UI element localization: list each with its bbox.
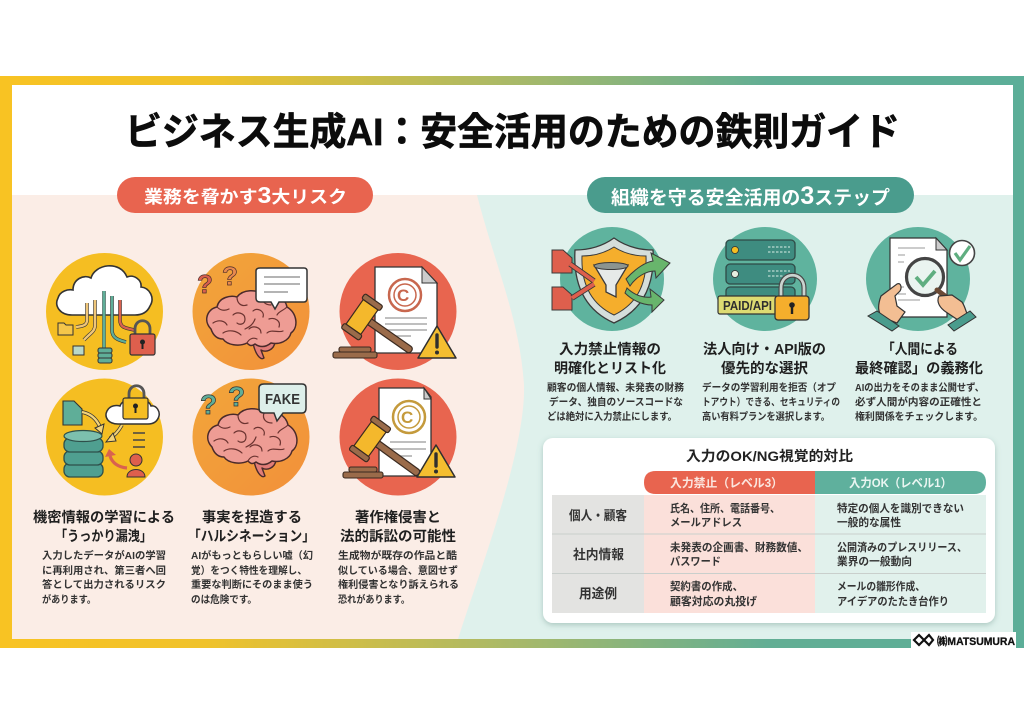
column header: allowed: 入力OK（レベル1） bbox=[849, 475, 952, 490]
text block: risk 1: 「うっかり漏洩」 bbox=[55, 528, 152, 545]
text block: step 2: トアウト）できる、セキュリティの bbox=[702, 396, 840, 408]
heading pill: risks: 業務を脅かす 3大リスク bbox=[144, 182, 347, 208]
row label column bbox=[552, 495, 644, 613]
text block: step 3: 権利関係をチェックします。 bbox=[855, 410, 983, 423]
icon: copyright document and warning: C bbox=[401, 408, 413, 427]
row: internal information: 業界の一般動向 bbox=[837, 554, 912, 568]
icon: shield and funnel bbox=[552, 227, 670, 331]
text block: risk 3: 著作権侵害と bbox=[355, 508, 441, 526]
text block: risk 3: 権利侵害となり訴えられる bbox=[338, 578, 459, 591]
icon: cloud data leak bbox=[46, 253, 163, 370]
text block: step 3: 必ず人間が内容の正確性と bbox=[855, 396, 982, 408]
row: use cases: アイデアのたたき台作り bbox=[837, 594, 949, 608]
allowed column bbox=[815, 495, 986, 613]
text block: risk 2 bbox=[188, 508, 315, 606]
icon: data leak database bbox=[46, 378, 163, 496]
text block: risk 3: 生成物が既存の作品と酷 bbox=[338, 549, 458, 562]
row: use cases: 用途例 bbox=[579, 586, 617, 601]
text block: step 1: 顧客の個人情報、未発表の財務 bbox=[547, 381, 685, 394]
icon: brain with speech bubble bbox=[192, 253, 310, 370]
text block: step 1: 入力禁止情報の bbox=[559, 340, 661, 358]
icon: brain with speech bubble: ? bbox=[197, 269, 213, 299]
text block: risk 3 bbox=[338, 508, 459, 606]
text block: step 1 bbox=[547, 340, 685, 423]
text block: risk 3: 恐れがあります。 bbox=[338, 593, 410, 606]
icon: copyright document and gavel bbox=[333, 253, 456, 370]
text block: risk 1: に再利用され、第三者へ回 bbox=[42, 564, 166, 577]
row: internal information: 社内情報 bbox=[573, 547, 624, 562]
text block: step 3: 最終確認」の義務化 bbox=[855, 359, 984, 377]
row: internal information: 未発表の企画書、財務数値、 bbox=[670, 540, 808, 554]
text block: step 2: 高い有料プランを選択します。 bbox=[702, 410, 830, 423]
text block: risk 1: 入力したデータがAIの学習 bbox=[42, 549, 166, 562]
text block: step 2 bbox=[702, 341, 840, 423]
text block: step 3: 「人間による bbox=[882, 341, 958, 358]
text block: risk 1: 機密情報の学習による bbox=[33, 508, 175, 526]
icon: server and lock: PAID/API bbox=[723, 299, 772, 313]
column header: forbidden bbox=[644, 471, 815, 494]
text block: risk 2: 重要な判断にそのまま使う bbox=[191, 578, 313, 591]
row: personal and customer: 個人・顧客 bbox=[569, 508, 627, 523]
row: personal and customer: 氏名、住所、電話番号、 bbox=[670, 501, 780, 515]
icon: brain with FAKE bubble: FAKE bbox=[265, 392, 300, 408]
row: personal and customer: 一般的な属性 bbox=[837, 515, 901, 529]
text block: step 1: どは絶対に入力禁止にします。 bbox=[547, 410, 677, 423]
table title: 入力のOK/NG視覚的対比 bbox=[686, 448, 853, 464]
row: use cases: メールの雛形作成、 bbox=[837, 579, 925, 593]
text block: risk 2: 事実を捏造する bbox=[202, 508, 302, 526]
row: personal and customer: メールアドレス bbox=[670, 516, 742, 529]
text block: risk 1: 答として出力されるリスク bbox=[42, 578, 166, 591]
icon: copyright document and gavel: C bbox=[397, 286, 409, 305]
gradient frame bbox=[0, 76, 1024, 648]
text block: step 2: 法人向け・API版の bbox=[703, 341, 826, 358]
text block: step 3: AIの出力をそのまま公開せず、 bbox=[855, 381, 984, 394]
text block: risk 1: があります。 bbox=[42, 593, 96, 606]
row: internal information: 公開済みのプレスリリース、 bbox=[837, 540, 967, 554]
forbidden column bbox=[644, 495, 815, 613]
text block: step 1: データ、独自のソースコードな bbox=[549, 396, 683, 408]
row: internal information: パスワード bbox=[670, 555, 721, 568]
text block: step 2: データの学習利用を拒否（オプ bbox=[702, 381, 837, 394]
icon: brain with FAKE bubble bbox=[192, 378, 310, 496]
icon: brain with FAKE bubble: ? bbox=[200, 389, 217, 420]
text block: risk 2: AIがもっともらしい嘘（幻 bbox=[191, 549, 313, 562]
text block: step 2: 優先的な選択 bbox=[721, 359, 809, 377]
panel: risks background bbox=[12, 195, 524, 639]
row: personal and customer: 特定の個人を識別できない bbox=[837, 501, 964, 515]
text block: risk 2: 覚）をつく特性を理解し、 bbox=[191, 564, 307, 577]
icon: brain with FAKE bubble: ? bbox=[228, 381, 245, 412]
icon: copyright document and warning bbox=[340, 378, 456, 496]
panel: OK/NG comparison table bbox=[543, 438, 995, 623]
text block: risk 2: のは危険です。 bbox=[191, 593, 257, 606]
row: internal information bbox=[573, 540, 967, 568]
row: personal and customer bbox=[569, 501, 964, 529]
icon: brain with speech bubble: ? bbox=[222, 261, 238, 291]
heading pill: risks bbox=[117, 177, 373, 213]
text block: risk 1 bbox=[33, 508, 175, 606]
text block: risk 3: 似している場合、意図せず bbox=[338, 564, 458, 577]
icon: server and lock bbox=[713, 227, 817, 331]
row: use cases bbox=[579, 579, 949, 608]
logo: MATSUMURA: ㈱MATSUMURA bbox=[937, 634, 1015, 648]
row: use cases: 顧客対応の丸投げ bbox=[670, 594, 757, 608]
title: ビジネス生成AI：安全活用のための鉄則ガイド bbox=[125, 112, 900, 154]
column header: allowed bbox=[815, 471, 986, 494]
row: use cases: 契約書の作成、 bbox=[670, 579, 743, 593]
text block: step 1: 明確化とリスト化 bbox=[554, 360, 667, 377]
text block: step 3 bbox=[855, 341, 984, 423]
heading pill: steps bbox=[587, 177, 914, 213]
heading pill: steps: 組織を守る安全活用の3ステップ bbox=[611, 182, 890, 210]
logo: MATSUMURA bbox=[911, 632, 1016, 648]
text block: risk 2: 「ハルシネーション」 bbox=[188, 528, 315, 545]
text block: risk 3: 法的訴訟の可能性 bbox=[340, 527, 456, 545]
panel: steps background bbox=[458, 195, 1013, 639]
icon: human review bbox=[866, 227, 976, 331]
column header: forbidden: 入力禁止（レベル3） bbox=[670, 475, 783, 490]
